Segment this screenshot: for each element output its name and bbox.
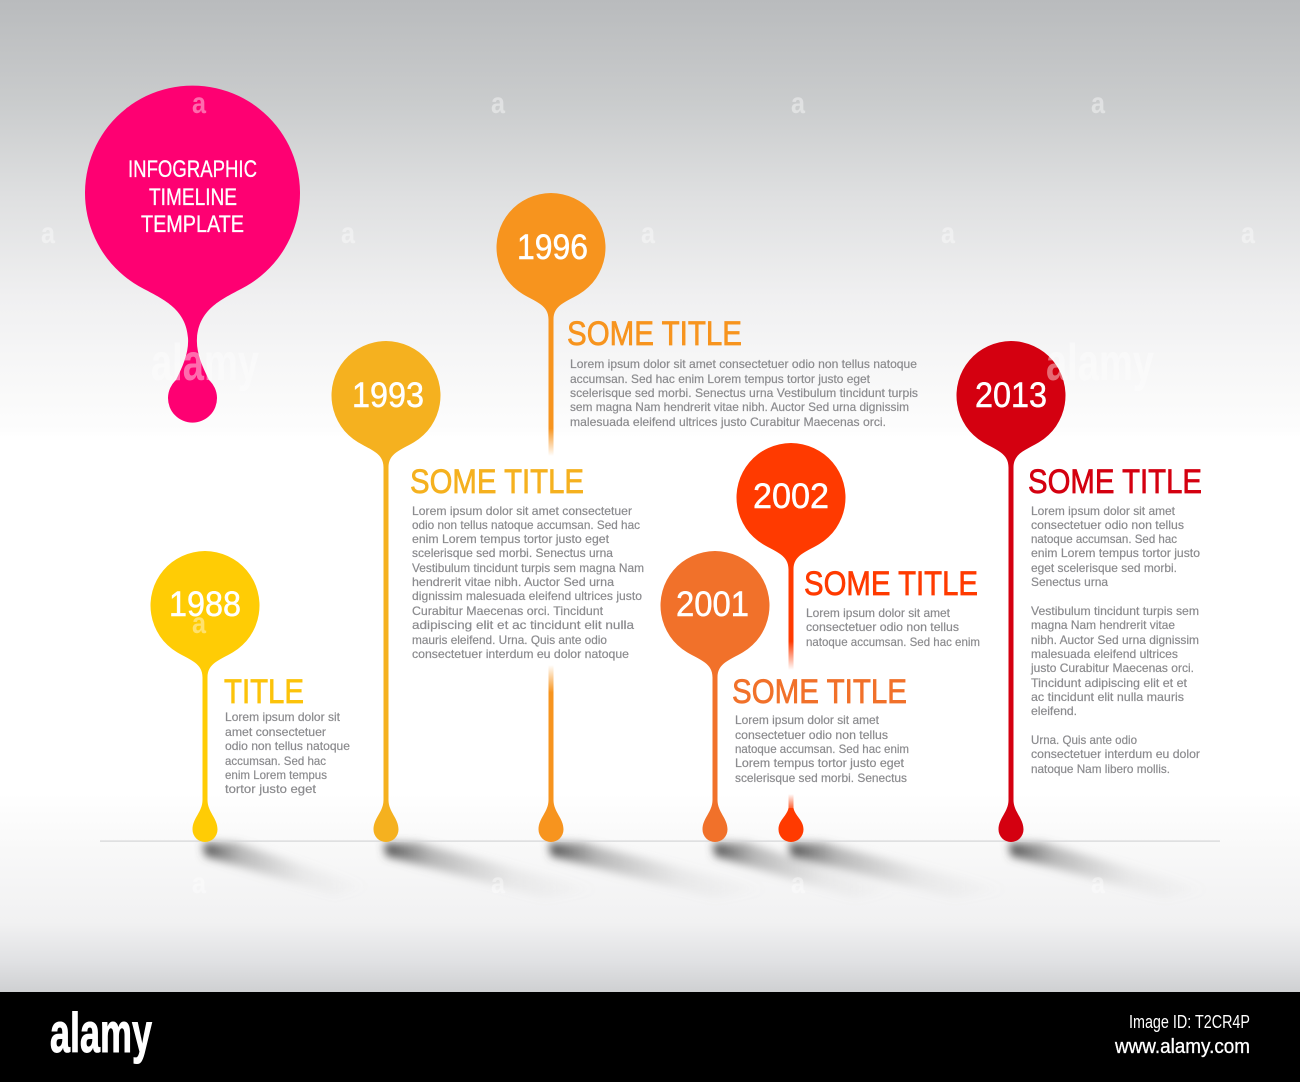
body 1988: tortor justo eget	[225, 782, 317, 796]
lower stem 2002	[788, 794, 794, 812]
body 2001: scelerisque sed morbi. Senectus	[735, 771, 907, 785]
body 2013: Lorem ipsum dolor sit amet	[1031, 504, 1176, 518]
pin 2001	[660, 551, 770, 842]
body 2001: natoque accumsan. Sed hac enim	[735, 742, 909, 756]
year 2013: 2013	[975, 376, 1047, 415]
heading text: TIMELINE	[149, 184, 237, 211]
body 2002: natoque accumsan. Sed hac enim	[806, 635, 980, 649]
upper stem 2002	[788, 568, 794, 670]
body 2001	[735, 713, 909, 785]
stock watermarks: a	[341, 217, 355, 250]
title 1988: TITLE	[224, 673, 304, 711]
foot 1996	[538, 800, 564, 842]
year 2002: 2002	[753, 477, 829, 516]
body 1993: Vestibulum tincidunt turpis sem magna Nam	[412, 561, 644, 575]
stock watermarks: a	[1241, 217, 1255, 250]
body 1988: enim Lorem tempus	[225, 768, 327, 782]
body 1988: odio non tellus natoque	[225, 739, 350, 753]
body 1996: sem magna Nam hendrerit vitae nibh. Auctor Sed urna dignissim	[570, 400, 909, 414]
body 2001: consectetuer odio non tellus	[735, 728, 888, 742]
stock watermarks: alamy	[151, 334, 259, 392]
heading text	[128, 156, 257, 238]
title 2002: SOME TITLE	[804, 565, 978, 603]
heading text: TEMPLATE	[141, 211, 244, 238]
foot 2002	[778, 808, 804, 842]
body 1993: consectetuer interdum eu dolor natoque	[412, 647, 629, 661]
body 2002: Lorem ipsum dolor sit amet	[806, 606, 951, 620]
body 2013: ac tincidunt elit nulla mauris	[1031, 690, 1184, 704]
title 2013: SOME TITLE	[1028, 463, 1202, 501]
body 2013: natoque Nam libero mollis.	[1031, 762, 1170, 776]
body 1993: Curabitur Maecenas orci. Tincidunt	[412, 604, 604, 618]
body 1993: Lorem ipsum dolor sit amet consectetuer	[412, 504, 632, 518]
body 2013: consectetuer interdum eu dolor	[1031, 747, 1200, 761]
stock watermarks: a	[192, 607, 206, 640]
stock watermarks: a	[1091, 867, 1105, 900]
title 2001: SOME TITLE	[732, 673, 907, 711]
pin head 2002	[736, 443, 845, 570]
stock watermarks: a	[641, 217, 655, 250]
body 2013: Urna. Quis ante odio	[1031, 733, 1137, 747]
alamy logo: alamy	[50, 1001, 152, 1064]
body 1993: dignissim malesuada eleifend ultrices justo	[412, 589, 642, 603]
body 2013: Tincidunt adipiscing elit et et	[1031, 676, 1188, 690]
body 2002	[806, 606, 980, 649]
timeline item: 2002	[736, 443, 980, 842]
body 2013: malesuada eleifend ultrices	[1031, 647, 1178, 661]
year 2001: 2001	[676, 585, 749, 624]
lower stem 1996	[548, 665, 554, 802]
body 1996: accumsan. Sed hac enim Lorem tempus tortor justo eget	[570, 372, 871, 386]
body 1993: odio non tellus natoque accumsan. Sed hac	[412, 518, 640, 532]
pin head 1996	[496, 193, 606, 320]
body 1996	[570, 357, 918, 429]
stock watermarks	[41, 87, 1255, 900]
stock watermarks: a	[491, 87, 505, 120]
title 1993: SOME TITLE	[410, 463, 584, 501]
stock watermarks: a	[192, 867, 206, 900]
timeline item: 2001	[660, 551, 909, 842]
footer bar	[0, 992, 1300, 1082]
stock watermarks: a	[192, 87, 206, 120]
body 2013: natoque accumsan. Sed hac	[1031, 532, 1177, 546]
body 1988: Lorem ipsum dolor sit	[225, 710, 341, 724]
cast shadows	[203, 843, 1210, 898]
upper stem 1996	[548, 318, 554, 456]
body 2001: Lorem tempus tortor justo eget	[735, 756, 905, 770]
stock watermarks: a	[41, 217, 55, 250]
body 1993: hendrerit vitae nibh. Auctor Sed urna	[412, 575, 614, 589]
body 2013: eleifend.	[1031, 704, 1077, 718]
pin 2013	[956, 341, 1066, 842]
body 2013: enim Lorem tempus tortor justo	[1031, 546, 1200, 560]
year 1996: 1996	[517, 228, 588, 267]
body 2013: nibh. Auctor Sed urna dignissim	[1031, 633, 1199, 647]
pin 1993	[332, 341, 440, 842]
title 1996: SOME TITLE	[567, 315, 742, 353]
body 1993: mauris eleifend. Urna. Quis ante odio	[412, 633, 607, 647]
stock watermarks: a	[1091, 87, 1105, 120]
body 2013: Vestibulum tincidunt turpis sem	[1031, 604, 1199, 618]
body 2013: consectetuer odio non tellus	[1031, 518, 1184, 532]
body 2013: Senectus urna	[1031, 575, 1108, 589]
timeline item: 1996	[496, 193, 918, 842]
stock watermarks: a	[791, 867, 805, 900]
image id: Image ID: T2CR4P	[1129, 1012, 1250, 1032]
website: www.alamy.com	[1114, 1036, 1250, 1058]
stock watermarks: alamy	[1046, 334, 1154, 392]
year 1988: 1988	[169, 585, 241, 624]
body 2013	[1030, 504, 1200, 776]
body 1996: malesuada eleifend ultrices justo Curabitur Maecenas orci.	[570, 415, 886, 429]
body 1993	[412, 504, 644, 661]
body 1993: adipiscing elit et ac tincidunt elit nulla	[412, 618, 634, 632]
body 2013: justo Curabitur Maecenas orci.	[1030, 661, 1194, 675]
pin 1988	[150, 551, 260, 842]
body 1988	[225, 710, 350, 796]
stock watermarks: a	[791, 87, 805, 120]
body 2002: consectetuer odio non tellus	[806, 620, 959, 634]
timeline item: 2013	[956, 341, 1202, 842]
timeline item: 1993	[332, 341, 644, 842]
body 2001: Lorem ipsum dolor sit amet	[735, 713, 880, 727]
baseline axis	[100, 840, 1220, 842]
heading text: INFOGRAPHIC	[128, 156, 257, 183]
body 2013: eget scelerisque sed morbi.	[1031, 561, 1177, 575]
stock watermarks: a	[941, 217, 955, 250]
timeline item: 1988	[150, 551, 350, 842]
body 1988: accumsan. Sed hac	[225, 754, 326, 768]
body 1996: Lorem ipsum dolor sit amet consectetuer odio non tellus natoque	[570, 357, 917, 371]
body 2013: magna Nam hendrerit vitae	[1031, 618, 1175, 632]
year 1993: 1993	[352, 376, 424, 415]
body 1996: scelerisque sed morbi. Senectus urna Vestibulum tincidunt turpis	[570, 386, 918, 400]
pink drop shape	[85, 86, 300, 423]
body 1993: enim Lorem tempus tortor justo eget	[412, 532, 610, 546]
body 1993: scelerisque sed morbi. Senectus urna	[412, 546, 613, 560]
body 1988: amet consectetuer	[225, 725, 326, 739]
stock watermarks: a	[491, 867, 505, 900]
heading pin: infographic timeline template	[85, 86, 300, 423]
